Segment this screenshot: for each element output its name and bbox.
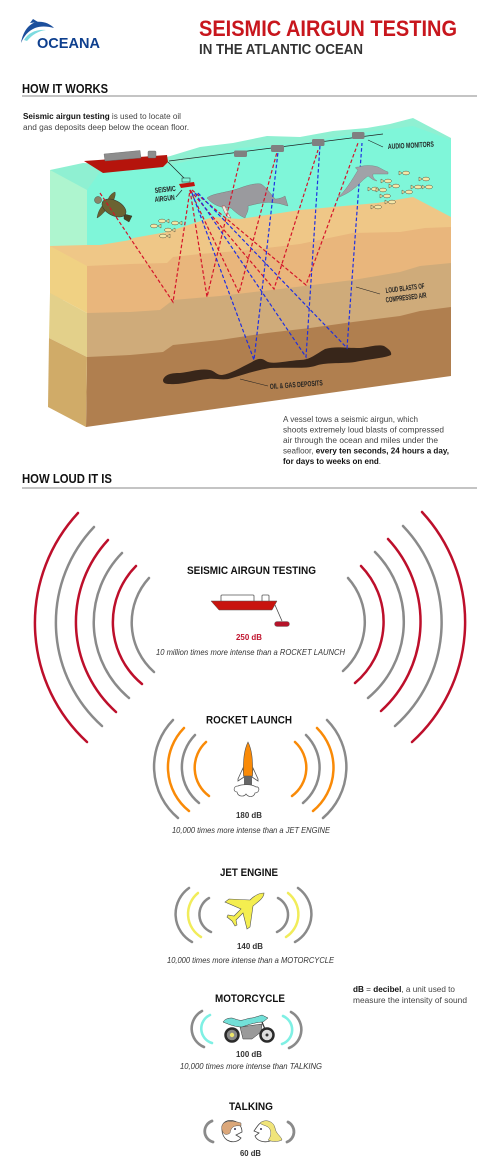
description text: seafloor, every ten seconds, 24 hours a day, [283,446,449,456]
heading: how it works: HOW IT WORKS [22,82,108,96]
intro text: and gas deposits deep below the ocean floor. [23,122,189,132]
heading: motorcycle: MOTORCYCLE [215,993,285,1005]
note: decibel definition: dB = decibel, a unit used to [353,984,455,994]
icon: rocket [234,742,259,797]
heading: talking: TALKING [229,1101,273,1113]
note: decibel definition: measure the intensity of sound [353,995,467,1005]
description text: shoots extremely loud blasts of compressed [283,424,444,434]
title: IN THE ATLANTIC OCEAN [199,42,363,58]
comparison: talking: 10,000 times more intense than TALKING [180,1061,322,1071]
sound waves: talking [205,1121,294,1142]
label: loud blasts of compressed air: COMPRESSED AIR [385,291,427,304]
description text: air through the ocean and miles under the [283,435,438,445]
value: 60 dB: 60 dB [240,1148,261,1158]
icon: airplane [225,893,264,929]
sound waves: jet [176,888,311,942]
description text: for days to weeks on end. [283,456,381,466]
label: seismic airgun: AIRGUN [154,193,175,204]
vessel [84,150,168,173]
comparison: motorcycle: 10,000 times more intense than a MOTORCYCLE [167,955,334,965]
light sand layer [50,197,451,300]
comparison: rocket launch: 10 million times more intense than a ROCKET LAUNCH [156,647,346,657]
heading: how loud it is: HOW LOUD IT IS [22,472,112,486]
water surface [50,118,451,260]
title: SEISMIC AIRGUN TESTING [199,16,457,41]
fish [150,171,432,238]
dolphin [337,166,388,198]
sound waves: rocket [154,720,346,818]
hydrophone cable and audio monitors [169,132,383,161]
label: oil and gas deposits [240,378,323,391]
label: seismic airgun [154,184,176,204]
comparison: jet engine: 10,000 times more intense than a JET ENGINE [172,825,330,835]
ocean cross-section diagram [48,118,451,427]
dark sand layer [87,227,451,340]
blue sound paths [192,143,362,360]
water front [87,126,451,260]
left faces [50,246,87,313]
icon: woman talking [254,1121,282,1142]
whale [207,184,288,218]
title [199,16,457,58]
oil and gas deposits [163,345,391,384]
icon: man talking [222,1120,242,1142]
sound waves: motorcycle [192,1011,301,1048]
description text: A vessel tows a seismic airgun, which [283,414,418,424]
intro text [23,111,189,132]
heading: rocket launch: ROCKET LAUNCH [206,714,292,726]
sea turtle [94,192,132,222]
description text [283,414,449,466]
label: oil and gas deposits: OIL & GAS DEPOSITS [270,378,323,391]
label: audio monitors: AUDIO MONITORS [388,140,434,151]
value: 250 dB: 250 dB [236,632,262,642]
icon: motorcycle [223,1015,274,1042]
label: loud blasts of compressed air [356,281,427,304]
icon: vessel and airgun [211,595,290,626]
value: 140 dB: 140 dB [237,941,263,951]
tan layer [87,263,451,365]
logo: Oceana: OCEANA [37,35,100,52]
seismic airgun [168,162,195,197]
sound waves: seismic airgun [35,512,465,742]
red sound paths [100,143,358,302]
water left face [50,170,87,250]
label: seismic airgun: SEISMIC [154,184,176,195]
note: decibel definition [353,984,467,1005]
label: loud blasts of compressed air: LOUD BLASTS OF [385,281,425,295]
value: 180 dB: 180 dB [236,810,262,820]
heading: seismic airgun testing: SEISMIC AIRGUN TESTING [187,565,316,577]
logo: Oceana [21,19,100,52]
value: 100 dB: 100 dB [236,1049,262,1059]
intro text: Seismic airgun testing is used to locate oil [23,111,181,121]
brown layer [86,307,451,427]
heading: jet engine: JET ENGINE [220,867,278,879]
